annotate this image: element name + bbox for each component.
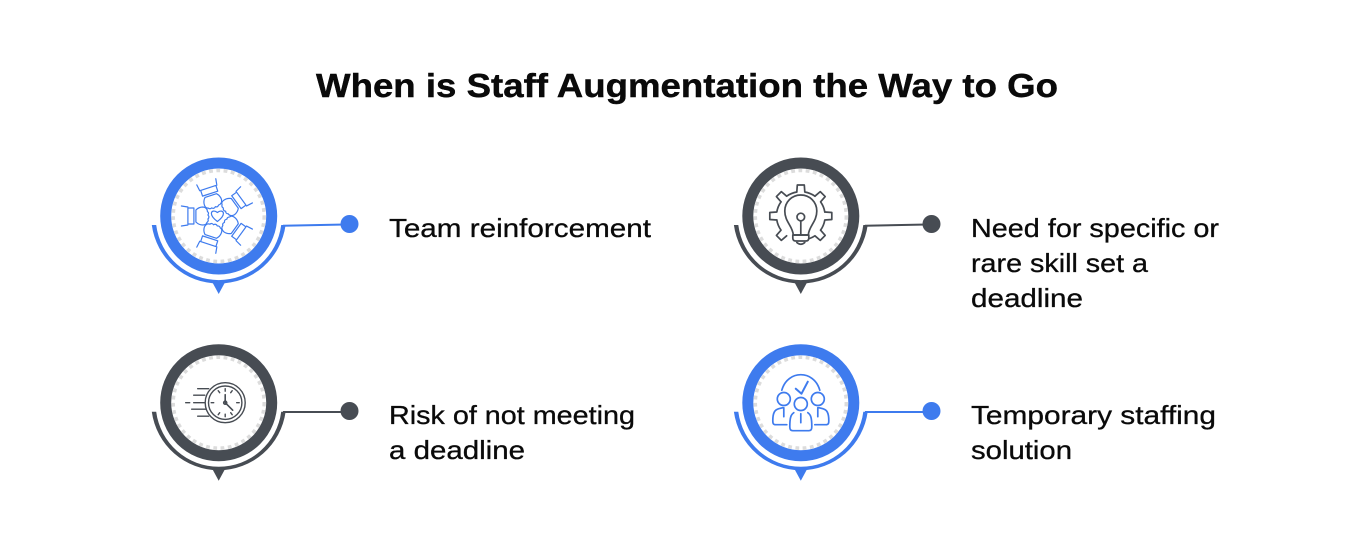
text: deadline risk bbox=[389, 400, 635, 465]
panel: team reinforcement bbox=[152, 163, 652, 294]
connector and dot bbox=[865, 402, 940, 420]
panel: specific skill bbox=[734, 163, 1219, 313]
connector and dot bbox=[283, 402, 358, 420]
connector and dot bbox=[865, 215, 940, 233]
badge: temporary staffing bbox=[734, 350, 868, 481]
text: deadline risk: a deadline bbox=[389, 435, 525, 465]
text: temporary staffing bbox=[971, 400, 1216, 465]
badge: deadline risk bbox=[152, 350, 286, 481]
title: When is Staff Augmentation the Way to Go bbox=[316, 67, 1058, 104]
text: deadline risk: Risk of not meeting bbox=[389, 400, 635, 430]
text: specific skill: Need for specific or bbox=[971, 213, 1219, 243]
text: specific skill: deadline bbox=[971, 283, 1083, 313]
panel: deadline risk bbox=[152, 350, 635, 481]
text: temporary staffing: solution bbox=[971, 435, 1072, 465]
badge: specific skill bbox=[734, 163, 868, 294]
icon: fast clock bbox=[186, 383, 245, 423]
badge: team reinforcement bbox=[152, 163, 286, 294]
text: team reinforcement: Team reinforcement bbox=[389, 213, 652, 243]
icon: joined fists bbox=[181, 179, 252, 253]
text: specific skill bbox=[971, 213, 1219, 313]
text: temporary staffing: Temporary staffing bbox=[971, 400, 1216, 430]
icon: gear with light bulb bbox=[769, 184, 833, 245]
panel: temporary staffing bbox=[734, 350, 1216, 481]
icon: team with check mark bbox=[773, 375, 829, 431]
text: specific skill: rare skill set a bbox=[971, 248, 1149, 278]
connector and dot bbox=[283, 215, 358, 233]
